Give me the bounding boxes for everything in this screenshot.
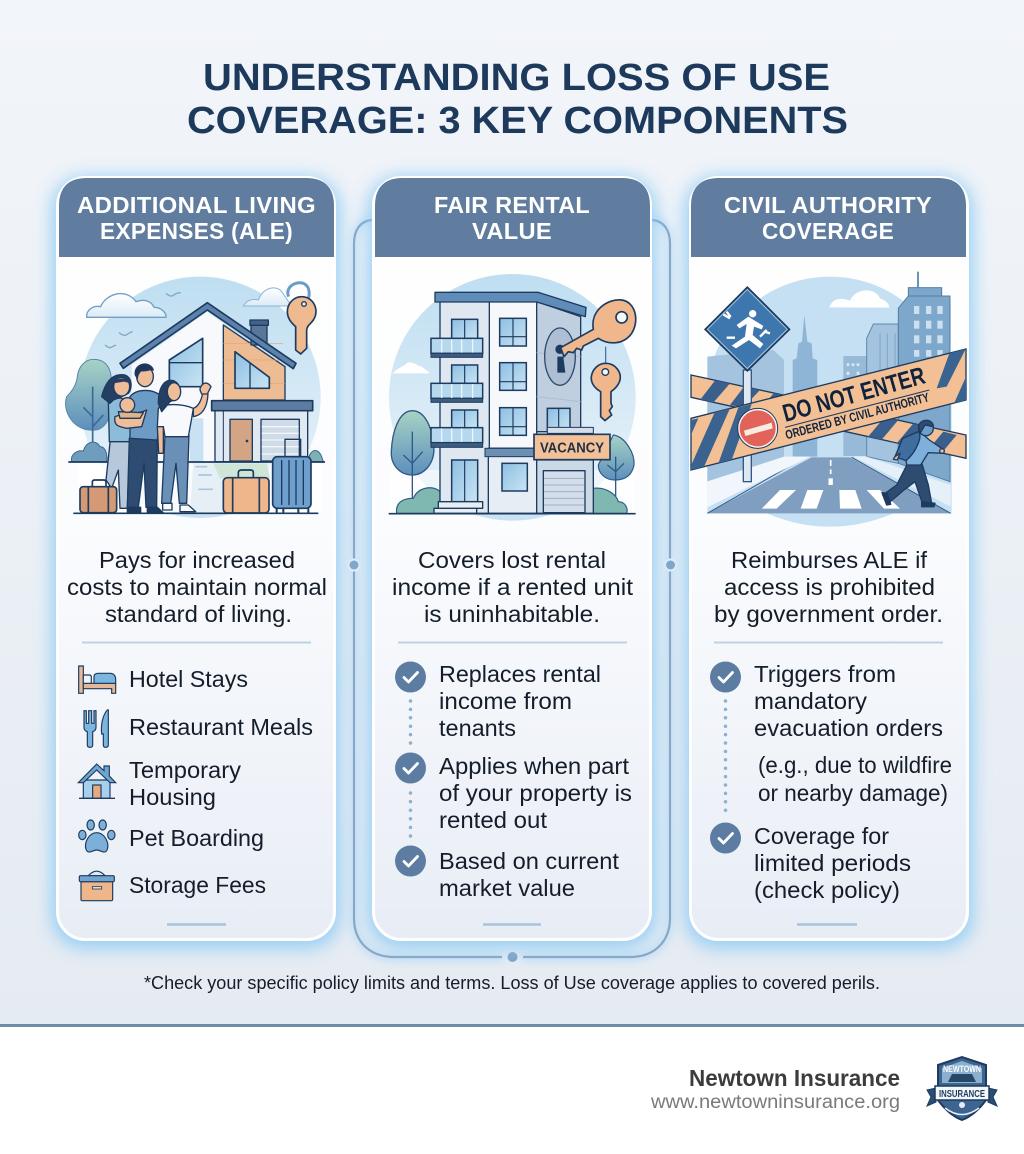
road bbox=[707, 457, 951, 513]
man bbox=[127, 438, 157, 507]
footnote: *Check your specific policy limits and terms. Loss of Use coverage applies to covered perils. bbox=[144, 973, 880, 993]
panel: additional living expenses bbox=[52, 177, 340, 948]
description: Pays for increased bbox=[99, 547, 295, 573]
checklist: civil authority points: Triggers from bbox=[754, 661, 896, 687]
left woman bbox=[106, 437, 130, 508]
icon: check bbox=[395, 662, 426, 692]
illustration: family in front of house bbox=[66, 277, 325, 518]
description: standard of living. bbox=[105, 601, 292, 627]
icon list: covered expenses: Restaurant Meals bbox=[129, 714, 313, 740]
connector bracket around middle panel bbox=[348, 220, 677, 962]
trees bbox=[391, 411, 434, 475]
vacancy sign bbox=[534, 434, 610, 460]
logo: newtown insurance shield bbox=[927, 1057, 997, 1120]
checklist: fair rental points: Based on current bbox=[439, 848, 619, 874]
building bbox=[440, 302, 490, 513]
header: civil authority coverage: COVERAGE bbox=[762, 218, 894, 244]
description: Reimburses ALE if bbox=[731, 547, 927, 573]
title: UNDERSTANDING LOSS OF USE bbox=[203, 57, 830, 99]
house bbox=[132, 312, 223, 462]
windows bbox=[452, 318, 570, 502]
title: COVERAGE: 3 KEY COMPONENTS bbox=[187, 100, 848, 142]
footer brand text bbox=[650, 1065, 900, 1113]
description bbox=[714, 547, 943, 627]
icon: check bbox=[710, 822, 741, 854]
checklist: fair rental points: Replaces rental bbox=[439, 661, 601, 687]
checklist: fair rental points: income from bbox=[439, 688, 572, 714]
sign bbox=[704, 286, 791, 482]
checklist: fair rental points bbox=[395, 661, 632, 901]
icon: house bbox=[78, 764, 116, 798]
checklist: fair rental points: rented out bbox=[439, 807, 547, 833]
header: civil authority coverage: CIVIL AUTHORITY bbox=[724, 192, 932, 218]
keyhole plate bbox=[545, 328, 575, 385]
clouds bbox=[87, 294, 166, 317]
description: income if a rented unit bbox=[392, 574, 633, 600]
icon: bed bbox=[79, 666, 116, 693]
icon list: covered expenses: Storage Fees bbox=[129, 872, 266, 898]
front tape: ORDERED BY CIVIL AUTHORITY bbox=[784, 390, 931, 442]
checklist: fair rental points: Applies when part bbox=[439, 753, 629, 779]
checklist: civil authority points: (e.g., due to wildfire bbox=[758, 752, 952, 778]
description bbox=[67, 547, 327, 627]
baby bbox=[115, 410, 147, 428]
no entry sign bbox=[738, 408, 778, 448]
icon: check bbox=[395, 752, 426, 784]
icon: paw bbox=[79, 820, 115, 852]
header: additional living expenses: ADDITIONAL LIVING bbox=[77, 192, 316, 218]
checklist: civil authority points: or nearby damage) bbox=[758, 780, 948, 806]
key bbox=[288, 283, 309, 306]
tree bbox=[66, 359, 113, 430]
checklist: fair rental points: of your property is bbox=[439, 780, 632, 806]
balconies bbox=[431, 338, 483, 443]
checklist: fair rental points: market value bbox=[439, 875, 575, 901]
vacancy sign: VACANCY bbox=[540, 441, 604, 457]
header: fair rental value bbox=[375, 178, 650, 257]
icon list: covered expenses: Temporary bbox=[129, 757, 241, 783]
checklist: civil authority points: evacuation orders bbox=[754, 715, 943, 741]
logo: newtown insurance shield: NEWTOWN bbox=[943, 1064, 981, 1074]
checklist: fair rental points: tenants bbox=[439, 715, 516, 741]
icon list: covered expenses: Pet Boarding bbox=[129, 825, 264, 851]
suitcases bbox=[80, 487, 117, 513]
running person bbox=[882, 420, 944, 507]
checklist: civil authority points: limited periods bbox=[754, 850, 911, 876]
icon list: covered expenses: Hotel Stays bbox=[129, 666, 248, 692]
illustration: apartment building with key bbox=[389, 274, 636, 521]
footer band bbox=[0, 1024, 1024, 1154]
header: additional living expenses: EXPENSES (ALE) bbox=[100, 218, 293, 244]
icon list: covered expenses bbox=[78, 666, 313, 901]
header: fair rental value: FAIR RENTAL bbox=[434, 192, 590, 218]
description: by government order. bbox=[714, 601, 943, 627]
back tape bbox=[691, 375, 966, 458]
header: fair rental value: VALUE bbox=[472, 218, 552, 244]
title bbox=[187, 57, 848, 142]
front tape: DO NOT ENTER bbox=[780, 363, 928, 428]
footer brand text: Newtown Insurance bbox=[689, 1065, 900, 1091]
illustration: do not enter street barrier bbox=[688, 272, 966, 527]
checklist: civil authority points bbox=[710, 661, 952, 903]
front tape bbox=[688, 348, 966, 472]
right woman bbox=[162, 435, 189, 503]
big key bbox=[561, 300, 636, 357]
description: is uninhabitable. bbox=[424, 601, 600, 627]
footer brand text: www.newtowninsurance.org bbox=[650, 1092, 900, 1113]
panel: civil authority coverage bbox=[685, 177, 973, 948]
panel: fair rental value bbox=[368, 177, 656, 948]
icon: storage box bbox=[79, 871, 114, 901]
icon: fork and knife bbox=[84, 710, 108, 747]
description: access is prohibited bbox=[724, 574, 935, 600]
header: civil authority coverage bbox=[691, 178, 966, 257]
small key bbox=[604, 347, 607, 363]
skyline bbox=[793, 315, 817, 457]
icon: check bbox=[395, 846, 426, 876]
checklist: civil authority points: mandatory bbox=[754, 688, 867, 714]
icon: check bbox=[710, 662, 741, 692]
garage bbox=[543, 471, 585, 513]
checklist: civil authority points: (check policy) bbox=[754, 877, 900, 903]
header: additional living expenses bbox=[59, 178, 334, 257]
description: Covers lost rental bbox=[418, 547, 606, 573]
checklist: civil authority points: Coverage for bbox=[754, 823, 889, 849]
description: costs to maintain normal bbox=[67, 574, 327, 600]
logo: newtown insurance shield: INSURANCE bbox=[939, 1088, 985, 1100]
icon list: covered expenses: Housing bbox=[129, 784, 216, 810]
description bbox=[392, 547, 633, 627]
